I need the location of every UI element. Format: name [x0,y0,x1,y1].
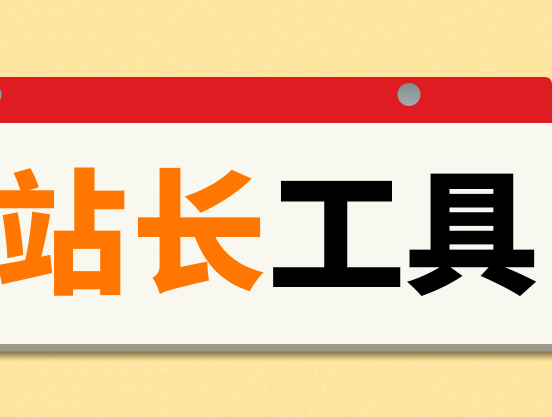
panel bottom edge [0,344,552,352]
title [0,161,539,312]
title: 长 [132,161,266,312]
icon: right pin [398,83,420,106]
panel shadow [0,351,552,363]
signboard panel [0,77,552,363]
title: 工 [268,161,405,312]
icon: left pin [0,83,2,106]
red header band [0,77,552,123]
title: 具 [404,161,539,312]
panel body [0,123,552,344]
